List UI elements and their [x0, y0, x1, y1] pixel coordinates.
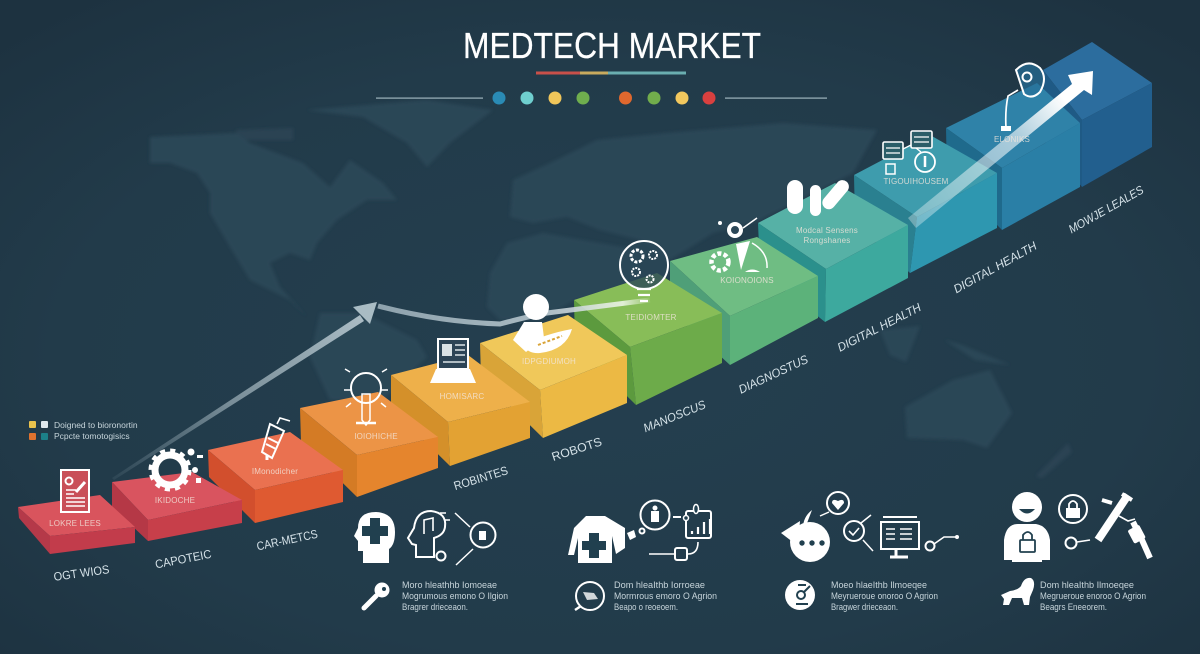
- text block: Meyrueroue onoroo O Agrion: [831, 591, 938, 602]
- step axis labels: DIAGNOSTUS: [736, 352, 810, 397]
- step 10: [854, 135, 997, 273]
- text block: Dom hleaIthb Iorroeae: [614, 580, 705, 591]
- step 4: [300, 392, 438, 497]
- icon: person with lock: [1004, 492, 1050, 562]
- icon: shirt with cross: [568, 516, 625, 563]
- step tile labels: TEIDIOMTER: [625, 313, 677, 322]
- icon: light bulb: [344, 369, 388, 425]
- step 5: [391, 355, 530, 466]
- step 12: [1043, 42, 1152, 187]
- step tile labels: IDPGDIUMOH: [522, 357, 576, 366]
- text block: Bragrer drieceaon.: [402, 602, 468, 613]
- step axis labels: MOWJE LEALES: [1066, 183, 1146, 236]
- icon: document: [61, 470, 89, 512]
- step tile labels: IOIOHICHE: [354, 432, 398, 441]
- step tile labels: Modcal Sensens: [796, 226, 858, 235]
- step 1: [18, 495, 135, 554]
- step tile labels: IMonodicher: [252, 467, 298, 476]
- icon: key: [364, 596, 376, 608]
- step tile labels: LOKRE LEES: [49, 519, 101, 528]
- text block: Beagrs Eneeorem.: [1040, 602, 1107, 613]
- step 7: [574, 273, 722, 405]
- step 2: [112, 472, 242, 541]
- icon: person circle: [640, 500, 670, 530]
- text block: [831, 580, 938, 613]
- icon: head with note: [408, 511, 445, 557]
- icon: magnifier check: [844, 515, 873, 551]
- step axis labels: ROBINTES: [452, 463, 510, 493]
- panel: data security: [1001, 492, 1150, 613]
- panel: brain care: [354, 511, 508, 613]
- step tile labels: HOMISARC: [440, 392, 484, 401]
- title: MEDTECH MARKET: [463, 25, 761, 66]
- step 9: [758, 183, 908, 322]
- step axis labels: [53, 183, 1146, 584]
- text block: [614, 580, 717, 613]
- icon: linked info circle: [470, 522, 496, 548]
- panel: digital diagnostics: [781, 492, 959, 613]
- legend: Doigned to bioronortin: [54, 420, 138, 430]
- icon: capsules: [787, 177, 852, 216]
- icon: infusion bag: [262, 418, 290, 460]
- step tile labels: [49, 135, 1030, 528]
- panel: wearable care: [568, 500, 717, 613]
- step axis labels: ROBOTS: [550, 435, 604, 464]
- step 3: [208, 432, 343, 523]
- step axis labels: MANOSCUS: [641, 397, 708, 435]
- icon: figure with leaf: [513, 294, 572, 353]
- icon: gears and figure: [712, 218, 767, 272]
- text block: Dom hleaIthb Ilmoeqee: [1040, 580, 1134, 591]
- world map: [150, 100, 1072, 478]
- step tile labels: IKIDOCHE: [155, 496, 195, 505]
- step axis labels: DIGITAL HEALTH: [951, 239, 1039, 296]
- text block: Beapo o reoeoem.: [614, 602, 678, 613]
- icon: lens ring: [575, 582, 604, 610]
- icon: small ring: [1066, 538, 1090, 548]
- icon: chart panel: [649, 504, 711, 560]
- title underline: [536, 72, 686, 74]
- text block: Moro hleathhb Iomoeae: [402, 580, 497, 591]
- icon: head with cross: [354, 512, 395, 563]
- icon: monitor: [881, 516, 919, 557]
- icon: syringe: [1098, 494, 1150, 558]
- text block: Bragwer drieceaon.: [831, 602, 898, 613]
- legend: [29, 420, 138, 441]
- arrow: lower trend: [112, 302, 377, 480]
- text block: Mogrumous emono O Ilgion: [402, 591, 508, 602]
- step tile labels: KOIONOIONS: [720, 276, 774, 285]
- text block: Megrueroue enoroo O Agrion: [1040, 591, 1146, 602]
- icon: data network: [883, 131, 935, 174]
- icon: lock circle: [1059, 495, 1087, 523]
- step axis labels: DIGITAL HEALTH: [835, 300, 924, 355]
- step 11: [946, 83, 1080, 230]
- step tile labels: Rongshanes: [804, 236, 850, 245]
- step 8: [670, 237, 818, 365]
- text block: [402, 580, 508, 613]
- icon: gear: [151, 448, 203, 489]
- icon: clinical badge: [785, 580, 815, 610]
- icon: gear bulb: [620, 241, 668, 301]
- step tile labels: ELONIKS: [994, 135, 1030, 144]
- icon: heart circle: [820, 492, 849, 516]
- step 6: [480, 315, 627, 438]
- step axis labels: OGT WIOS: [53, 562, 110, 584]
- decorative dot row: [376, 92, 827, 104]
- legend: Pcpcte tomotogisics: [54, 431, 130, 441]
- text block: [1040, 580, 1146, 613]
- text block: Moeo hlaeIthb Ilmoeqee: [831, 580, 927, 591]
- icon: laptop: [430, 339, 476, 383]
- icon: node line: [926, 535, 959, 550]
- icon: dog: [1001, 578, 1034, 605]
- step axis labels: CAPOTEIC: [154, 547, 213, 571]
- step tile labels: TIGOUIHOUSEM: [883, 177, 949, 186]
- step axis labels: CAR-METCS: [255, 527, 319, 553]
- icon: stethoscope: [1001, 63, 1044, 131]
- arrow: middle trend: [378, 300, 650, 324]
- arrow: upper trend: [908, 71, 1093, 228]
- text block: Mormrous emoro O Agrion: [614, 591, 717, 602]
- icon: chat bubble: [781, 510, 830, 562]
